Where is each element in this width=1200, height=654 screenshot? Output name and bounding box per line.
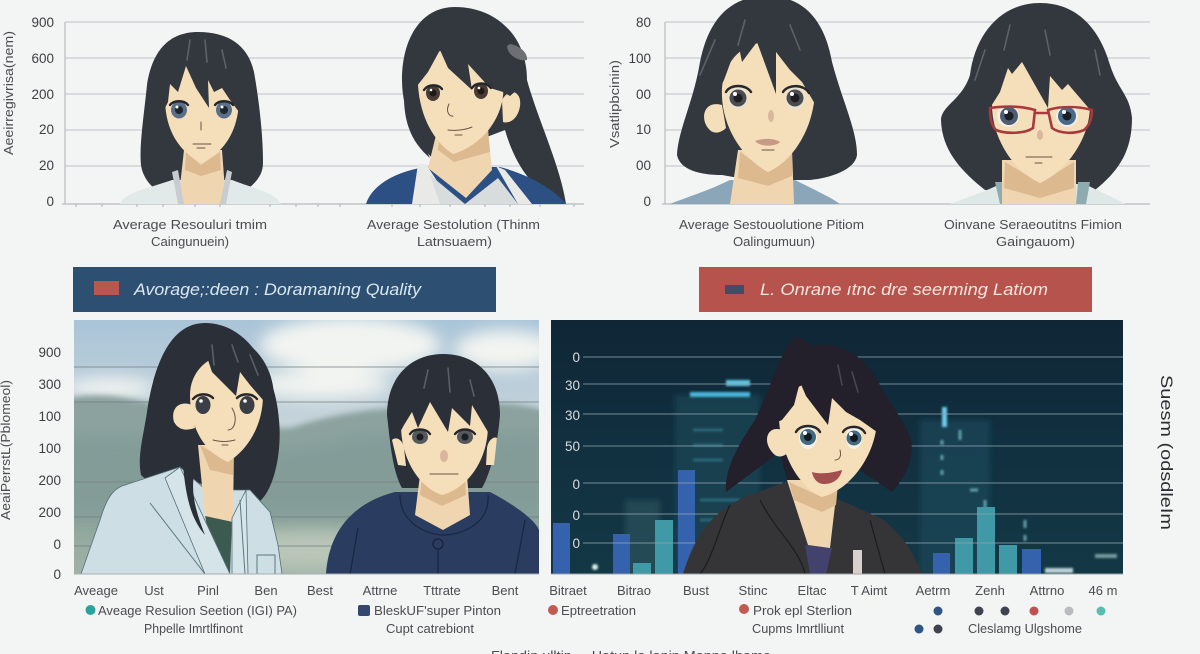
x-axis labels: full-width row: T Aimt — [851, 583, 888, 598]
x-axis caption left: Average Resouluri tmim — [113, 217, 267, 232]
y-axis title: Aeeirregivrisa(nem) — [1, 31, 16, 155]
y-axis labels: 200 — [38, 473, 61, 488]
x-axis caption left second line: Oalingumuun) — [733, 234, 815, 249]
x-axis labels: full-width row: Bent — [492, 583, 519, 598]
grid lines — [583, 357, 1123, 543]
x-axis labels: full-width row: Bust — [683, 583, 709, 598]
scene image — [74, 320, 539, 574]
x-axis labels: full-width row: Ust — [144, 583, 164, 598]
character: smiling girl in dark hoodie — [683, 336, 922, 574]
scene image — [551, 320, 1123, 574]
panel: top-left chart — [1, 7, 584, 249]
grid lines — [74, 367, 539, 546]
x-axis labels: full-width row: Eltac — [798, 583, 827, 598]
x-axis caption right second line: Latnsuaem) — [417, 234, 492, 249]
y-axis labels: 00 — [636, 158, 651, 173]
x-axis labels: full-width row: Pinl — [197, 583, 219, 598]
x-axis labels: full-width row: Zenh — [975, 583, 1005, 598]
legend row: Cupt catrebiont — [386, 621, 474, 636]
y-axis labels: 20 — [39, 122, 54, 137]
y-axis labels: 0 — [572, 508, 580, 523]
y-axis labels: 0 — [53, 537, 61, 552]
y-axis labels: 20 — [39, 158, 54, 173]
x-axis labels: full-width row: Bitraet — [549, 583, 587, 598]
banner: blue quality heading — [73, 267, 496, 312]
y-axis labels: 100 — [38, 441, 61, 456]
y-axis labels: 600 — [31, 51, 54, 66]
x-axis labels: full-width row: Best — [307, 583, 333, 598]
x-axis labels: full-width row: Bitrao — [617, 583, 651, 598]
x-axis labels: full-width row: 46 m — [1089, 583, 1117, 598]
legend row: Phpelle Imrtlfinont — [144, 621, 243, 636]
y-axis labels: 900 — [38, 345, 61, 360]
panel: bottom-left mountain scene — [0, 320, 539, 579]
legend row: BleskUF'super Pinton — [374, 603, 501, 618]
y-axis labels: 0 — [572, 350, 580, 365]
panel: top-right chart — [607, 0, 1150, 249]
y-axis labels — [31, 15, 54, 209]
y-axis labels: 30 — [565, 378, 580, 393]
y-axis labels — [565, 350, 580, 551]
legend row: Eptreetration — [561, 603, 636, 618]
y-axis labels — [38, 345, 61, 582]
x-axis labels: full-width row: Tttrate — [423, 583, 461, 598]
character: girl with shoulder-length hair — [670, 0, 857, 204]
legend row: Cupms Imrtlliunt — [752, 621, 844, 636]
y-axis labels: 0 — [572, 536, 580, 551]
bar series — [553, 470, 1041, 574]
x-axis labels: full-width row: Ben — [254, 583, 278, 598]
banner: red streaming heading: L. Onrane ıtnc dre seerming Latiom — [760, 280, 1048, 299]
x-axis labels: full-width row — [74, 583, 1117, 598]
x-axis caption left: Average Sestouolutione Pitiom — [679, 217, 864, 232]
y-axis labels: 0 — [46, 194, 54, 209]
y-axis labels: 300 — [38, 377, 61, 392]
panel: bottom-right night city scene — [551, 320, 1123, 574]
y-axis labels: 00 — [636, 87, 651, 102]
character: girl with straight bob — [120, 32, 281, 204]
character: girl with long side hair — [366, 7, 566, 204]
x-axis labels: full-width row: Aveage — [74, 583, 118, 598]
banner: red streaming heading — [699, 267, 1092, 312]
y-axis labels: 0 — [643, 194, 651, 209]
x-axis caption left second line: Caingunuein) — [151, 234, 229, 249]
right vertical axis title: Suesm (odsdleIm — [1157, 375, 1176, 530]
y-axis labels: 30 — [565, 408, 580, 423]
y-axis labels: 50 — [565, 439, 580, 454]
x-axis labels: full-width row: Attrne — [363, 583, 397, 598]
y-axis labels: 0 — [53, 567, 61, 582]
x-axis caption right: Average Sestolution (Thinm — [367, 217, 540, 232]
x-axis labels: full-width row: Stinc — [739, 583, 768, 598]
x-axis caption right: Oinvane Seraeoutitns Fimion — [944, 217, 1122, 232]
legend row: Aveage Resulion Seetion (IGI) PA) — [98, 603, 297, 618]
banner: blue quality heading: Avorage;:deen : Doramaning Quality — [133, 280, 423, 299]
y-axis labels: 200 — [38, 505, 61, 520]
y-axis labels — [628, 15, 651, 209]
y-axis labels: 100 — [38, 409, 61, 424]
legend row — [86, 603, 1106, 636]
x-axis labels: full-width row: Aetrm — [916, 583, 950, 598]
grid lines — [662, 22, 1150, 204]
y-axis labels: 200 — [31, 87, 54, 102]
y-axis labels: 900 — [31, 15, 54, 30]
y-axis labels: 10 — [636, 122, 651, 137]
x-axis caption right second line: Gaingauom) — [996, 234, 1075, 249]
y-axis labels: 80 — [636, 15, 651, 30]
legend row: Cleslamg Ulgshome — [968, 621, 1082, 636]
character: girl with red glasses — [941, 3, 1132, 204]
y-axis title: Vsatlipbcinin) — [607, 60, 622, 148]
legend row: Prok epl Sterlion — [753, 603, 852, 618]
grid lines — [62, 22, 584, 207]
character: woman in pale coat — [81, 323, 282, 574]
y-axis labels: 100 — [628, 51, 651, 66]
y-axis labels: 0 — [572, 477, 580, 492]
x-axis labels: full-width row: Attrno — [1030, 583, 1064, 598]
character: boy in navy sweater — [326, 354, 539, 574]
